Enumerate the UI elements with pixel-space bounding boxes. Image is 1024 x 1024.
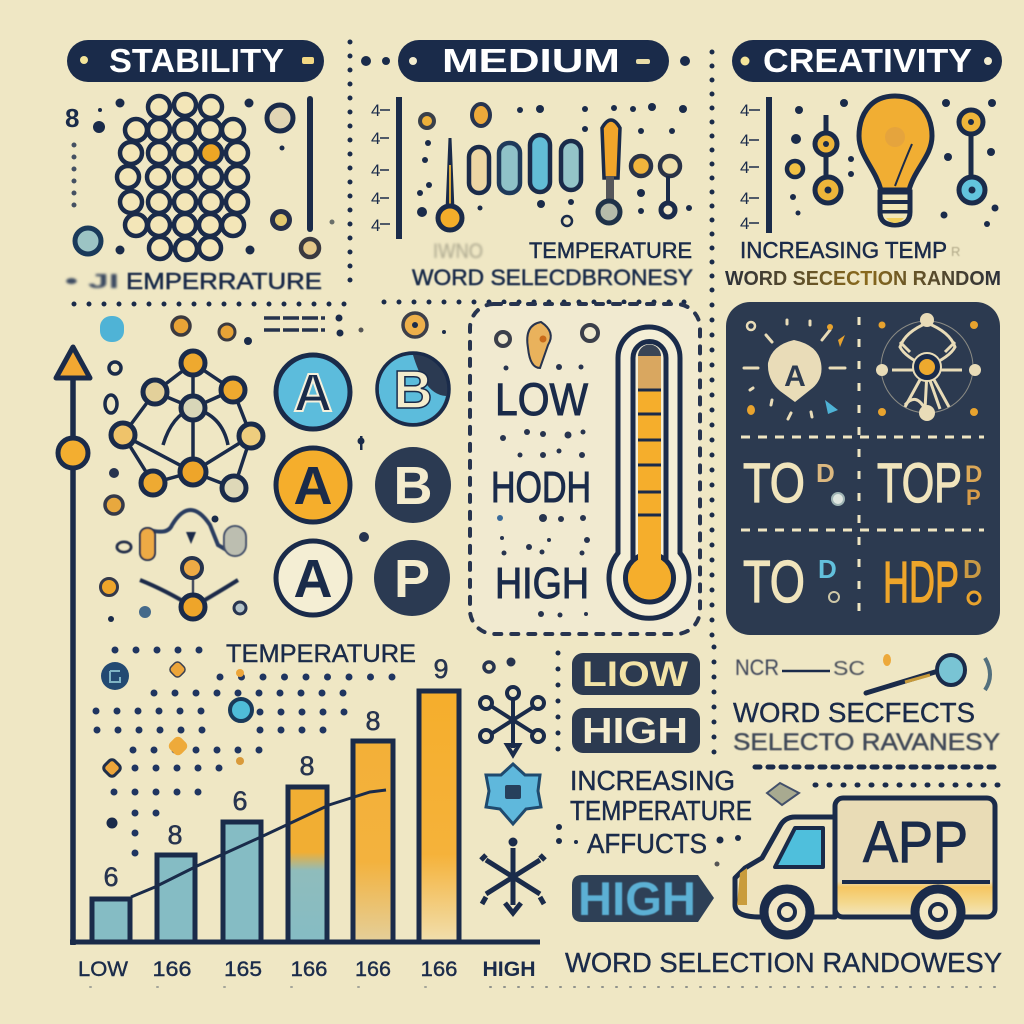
axis labels: 165 bbox=[224, 958, 262, 981]
option: white A bbox=[276, 541, 350, 615]
panel: medium bbox=[371, 97, 693, 290]
label: HOP: D bbox=[963, 554, 982, 584]
panel: creativity: R bbox=[951, 244, 960, 259]
option: dark P: P bbox=[394, 549, 430, 609]
bar values: 8 bbox=[365, 706, 381, 736]
option: orange A: A bbox=[294, 456, 332, 516]
option: orange A bbox=[276, 448, 350, 522]
honeycomb lattice icon bbox=[117, 94, 248, 260]
axis labels: HIGH bbox=[482, 958, 536, 981]
label: TOP 2: TOP bbox=[877, 451, 962, 514]
axis labels: 166 bbox=[152, 958, 192, 981]
pill: LOW bbox=[572, 653, 700, 695]
icon: A badge bbox=[744, 320, 845, 419]
option: dark B bbox=[375, 447, 451, 523]
panel: network and letter options bbox=[56, 313, 451, 945]
icon: light bulb bbox=[859, 96, 932, 225]
panel: medium: WORD SELECDBRONESY bbox=[412, 265, 693, 290]
panel: top grid bbox=[726, 302, 1000, 635]
label: TOP 3: TO bbox=[743, 549, 805, 615]
letter circles bbox=[276, 352, 451, 616]
chart markers bbox=[101, 660, 252, 828]
panel: stability: EMPERRATURE bbox=[126, 268, 322, 294]
label: TOP 2: P bbox=[966, 485, 981, 510]
icon: delivery truck bbox=[735, 783, 995, 935]
label: TOP 1: D bbox=[816, 458, 835, 488]
panel: medium: IWNO bbox=[433, 240, 483, 263]
pill: HIGH bbox=[572, 708, 700, 753]
axis and tick labels: 4 bbox=[371, 189, 380, 208]
option: blue B bbox=[376, 352, 450, 426]
bar values: 8 bbox=[299, 751, 315, 781]
bar chart bbox=[70, 640, 540, 981]
axis labels: LOW bbox=[78, 958, 128, 981]
bars bbox=[92, 691, 459, 942]
label: HOP: HDP bbox=[883, 550, 959, 615]
option: dark B: B bbox=[394, 456, 432, 516]
panel: creativity: WORD SECECTION RANDOM bbox=[725, 268, 1001, 290]
axis and tick labels: 4 bbox=[371, 129, 380, 148]
label: TOP 2: D bbox=[965, 461, 982, 488]
trend line bbox=[131, 790, 386, 897]
text: increasing caption with key: SC bbox=[833, 658, 865, 680]
pill: HIGH: HIGH bbox=[582, 710, 688, 751]
bar values: 8 bbox=[167, 820, 183, 850]
label: LOW: LOW bbox=[495, 374, 588, 425]
text: increasing caption with key bbox=[735, 654, 990, 693]
arrow tag: HIGH: HIGH bbox=[578, 872, 696, 925]
icon: key bbox=[866, 654, 990, 693]
panel: stability: • JI bbox=[65, 271, 119, 293]
network diagram bbox=[111, 351, 263, 500]
bar values bbox=[103, 654, 449, 892]
header: stability bbox=[67, 40, 324, 82]
header: stability: STABILITY bbox=[109, 42, 284, 79]
panel: creativity bbox=[725, 96, 1001, 290]
option: dark P bbox=[374, 540, 450, 616]
icon: star network bbox=[876, 313, 981, 421]
axis and tick labels: 4 bbox=[371, 101, 380, 120]
label: TOP 1: TO bbox=[743, 451, 805, 514]
text block: increasing temperature affects: AFFUCTS bbox=[587, 828, 707, 859]
option: blue A: A bbox=[294, 363, 332, 423]
icon: A badge: A bbox=[784, 360, 806, 393]
icon: snowflake 1 bbox=[480, 687, 544, 755]
header: creativity: CREATIVITY bbox=[763, 42, 972, 79]
axis and tick labels: 4 bbox=[740, 158, 749, 177]
axis labels: 166 bbox=[420, 958, 458, 981]
dot matrix bbox=[96, 650, 395, 853]
axis labels bbox=[78, 958, 536, 981]
text block: increasing temperature affects: INCREASING bbox=[570, 765, 735, 796]
axis labels: 166 bbox=[355, 958, 391, 981]
panel: stability: 8 bbox=[65, 103, 79, 133]
axis and tick labels bbox=[740, 97, 769, 233]
text: word selection randomness: WORD SELECTION RANDOWESY bbox=[565, 947, 1002, 978]
sliders and capsules bbox=[417, 103, 692, 230]
blurred network diagram bbox=[117, 510, 246, 619]
header: medium bbox=[361, 40, 690, 82]
label: TOP 3: D bbox=[818, 554, 837, 584]
icon: small pin bbox=[496, 322, 598, 368]
axis and tick labels bbox=[371, 97, 399, 239]
icon: snowflake 2 bbox=[481, 838, 545, 913]
label: HODH: HODH bbox=[491, 463, 591, 512]
bar values: 9 bbox=[433, 654, 449, 684]
text: word secfects: WORD SECFECTS bbox=[733, 697, 975, 728]
icon: blue badge bbox=[486, 764, 541, 824]
chart axis bbox=[70, 940, 540, 944]
text block: increasing temperature affects: TEMPERATURE bbox=[570, 795, 752, 826]
text block: increasing temperature affects bbox=[556, 765, 752, 866]
axis and tick labels: 4 bbox=[371, 161, 380, 180]
text: increasing caption with key: NCR bbox=[735, 655, 779, 680]
bar values: 6 bbox=[232, 786, 248, 816]
panel: creativity: INCREASING TEMP bbox=[740, 237, 947, 263]
axis and tick labels: 4 bbox=[371, 216, 380, 235]
header: creativity bbox=[732, 40, 1002, 82]
text: selecto randomness: SELECTO RAVANESY bbox=[733, 729, 1000, 756]
panel: thermometer bbox=[470, 304, 700, 634]
label: APP: APP bbox=[863, 810, 968, 875]
arrow axis bbox=[56, 347, 90, 945]
axis and tick labels: 4 bbox=[740, 214, 749, 233]
chart title: TEMPERATURE bbox=[226, 640, 416, 668]
nodes bbox=[787, 99, 998, 227]
dot clusters bbox=[497, 364, 590, 618]
option: blue A bbox=[276, 355, 350, 429]
axis and tick labels: 4 bbox=[740, 101, 749, 120]
option: white A: A bbox=[294, 549, 332, 609]
pill: LOW: LIOW bbox=[582, 655, 688, 694]
panel: stability bbox=[65, 94, 334, 294]
header: medium: MEDIUM bbox=[442, 42, 620, 79]
axis and tick labels: 4 bbox=[740, 131, 749, 150]
option: blue B: B bbox=[394, 360, 432, 420]
panel: medium: TEMPERATURE bbox=[529, 238, 692, 263]
axis labels: 166 bbox=[290, 958, 328, 981]
label: HIGH: HIGH bbox=[495, 559, 589, 608]
icon: thermometer bbox=[609, 327, 689, 618]
axis and tick labels: 4 bbox=[740, 189, 749, 208]
icon column: snowflakes and badge bbox=[480, 658, 545, 913]
bar values: 6 bbox=[103, 862, 119, 892]
scattered nodes bbox=[100, 313, 446, 622]
